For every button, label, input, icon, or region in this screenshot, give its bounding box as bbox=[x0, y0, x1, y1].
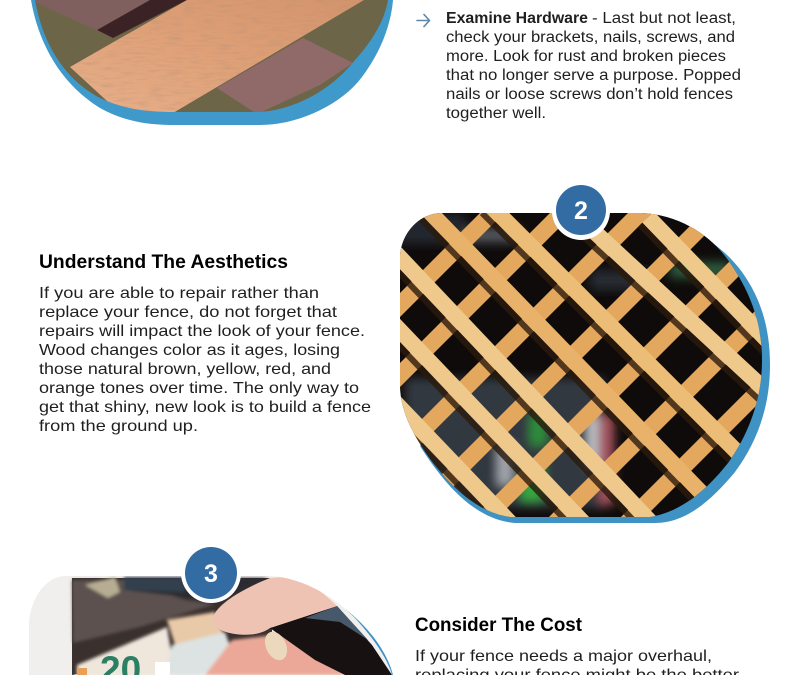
paragraph: aesthetics: replace your fence, do not forget that bbox=[39, 304, 338, 321]
paragraph: aesthetics: from the ground up. bbox=[39, 418, 198, 435]
number badge 2 bbox=[552, 182, 610, 240]
blue blob border bbox=[420, 221, 770, 523]
paragraph: cost bbox=[415, 648, 740, 675]
lattice photo bbox=[400, 213, 762, 517]
number badge 2: 2 bbox=[574, 197, 588, 225]
paragraph: aesthetics: those natural brown, yellow, red, and bbox=[39, 361, 331, 378]
examine hardware text: - Last but not least, bbox=[592, 10, 736, 27]
examine hardware text: Examine Hardware bbox=[446, 10, 588, 27]
paragraph: aesthetics: Wood changes color as it ages, losing bbox=[39, 342, 340, 359]
paragraph: aesthetics: repairs will impact the look of your fence. bbox=[39, 323, 365, 340]
examine hardware text: that no longer serve a purpose. Popped bbox=[446, 67, 741, 84]
paragraph: cost: If your fence needs a major overhaul, bbox=[415, 648, 712, 665]
paragraph: aesthetics: If you are able to repair rather than bbox=[39, 285, 319, 302]
image 1: weathered fence boards in blue-edged blob bbox=[30, 0, 395, 125]
blue blob border bbox=[31, 0, 393, 125]
photo of fence boards bbox=[30, 0, 395, 115]
main slats bbox=[400, 213, 762, 517]
thin blue edge bbox=[345, 610, 392, 675]
icon: arrow bbox=[417, 14, 430, 26]
list item: examine hardware bbox=[417, 10, 741, 122]
image 2: wooden lattice in blue-edged blob bbox=[400, 213, 770, 523]
examine hardware text bbox=[446, 10, 741, 122]
number badge 3 bbox=[181, 543, 241, 603]
wallet photo bbox=[25, 570, 395, 675]
image 3: hand pulling money from wallet bbox=[25, 570, 395, 675]
number badge 3: 3 bbox=[204, 560, 218, 588]
cross slats bbox=[400, 213, 762, 517]
heading: consider the cost: Consider The Cost bbox=[415, 615, 583, 636]
examine hardware text: check your brackets, nails, screws, and bbox=[446, 29, 735, 46]
paragraph: aesthetics: orange tones over time. The only way to bbox=[39, 380, 359, 397]
paragraph: aesthetics bbox=[39, 285, 371, 435]
paragraph: aesthetics: get that shiny, new look is to build a fence bbox=[39, 399, 371, 416]
heading: understand the aesthetics: Understand The Aesthetics bbox=[39, 252, 288, 273]
examine hardware text: more. Look for rust and broken pieces bbox=[446, 48, 726, 65]
examine hardware text: together well. bbox=[446, 105, 546, 122]
slat shadows bbox=[400, 213, 762, 517]
examine hardware text: nails or loose screws don’t hold fences bbox=[446, 86, 733, 103]
